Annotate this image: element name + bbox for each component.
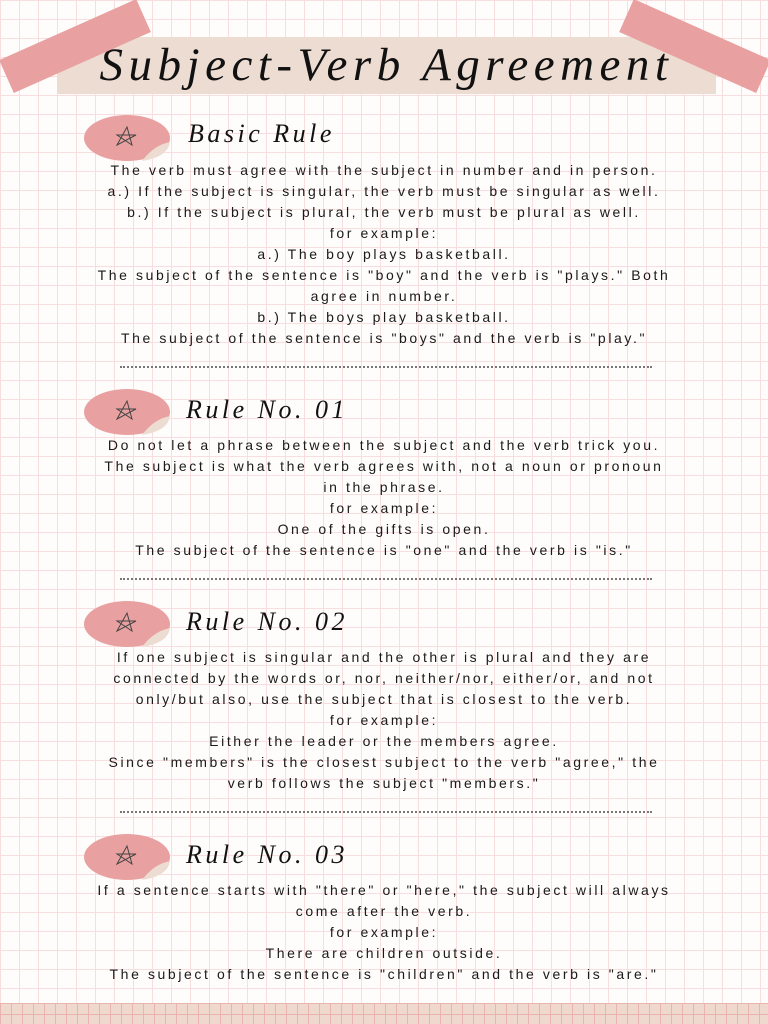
text: rule 1: in the phrase. <box>323 479 445 495</box>
icon: sticker rule 2 <box>84 601 170 647</box>
text: rule 3: If a sentence starts with "there" or "here," the subject will always <box>97 882 671 898</box>
text: basic rule: b.) If the subject is plural, the verb must be plural as well. <box>127 204 641 220</box>
text: basic rule: The subject of the sentence is "boys" and the verb is "play." <box>121 330 647 346</box>
text: rule 2: only/but also, use the subject that is closest to the verb. <box>136 691 632 707</box>
heading: rule 3: Rule No. 03 <box>186 840 348 869</box>
text: rule 2: for example: <box>330 712 438 728</box>
footer strip <box>0 1003 768 1024</box>
icon: sticker basic <box>84 115 170 161</box>
text: rule 2: Either the leader or the members agree. <box>209 733 559 749</box>
text: rule 1: One of the gifts is open. <box>278 521 490 537</box>
text: rule 1: for example: <box>330 500 438 516</box>
text: rule 2: verb follows the subject "members." <box>228 775 540 791</box>
title: Subject-Verb Agreement <box>100 39 673 91</box>
text: rule 2: Since "members" is the closest subject to the verb "agree," the <box>108 754 659 770</box>
text: rule 2: If one subject is singular and the other is plural and they are <box>117 649 651 665</box>
text: basic rule: The subject of the sentence is "boy" and the verb is "plays." Both <box>98 267 670 283</box>
text: rule 3: for example: <box>330 924 438 940</box>
text: rule 1: The subject of the sentence is "one" and the verb is "is." <box>135 542 633 558</box>
text: basic rule: b.) The boys play basketball. <box>257 309 511 325</box>
tape left <box>0 0 151 93</box>
text: rule 3: There are children outside. <box>266 945 502 961</box>
text: basic rule <box>98 162 670 346</box>
icon: sticker rule 3 <box>84 834 170 880</box>
text: basic rule: The verb must agree with the subject in number and in person. <box>111 162 657 178</box>
heading: rule 2: Rule No. 02 <box>186 607 348 636</box>
text: rule 3 <box>97 882 671 982</box>
tape right <box>619 0 768 93</box>
heading: basic rule: Basic Rule <box>188 119 335 148</box>
text: rule 3: The subject of the sentence is "children" and the verb is "are." <box>110 966 658 982</box>
text: rule 3: come after the verb. <box>296 903 472 919</box>
text: rule 2 <box>108 649 659 791</box>
text: rule 1: Do not let a phrase between the subject and the verb trick you. <box>108 437 660 453</box>
text: basic rule: a.) If the subject is singular, the verb must be singular as well. <box>108 183 660 199</box>
text: rule 2: connected by the words or, nor, neither/nor, either/or, and not <box>113 670 655 686</box>
text: basic rule: agree in number. <box>311 288 457 304</box>
text: basic rule: a.) The boy plays basketball. <box>257 246 511 262</box>
text: rule 1: The subject is what the verb agrees with, not a noun or pronoun <box>104 458 664 474</box>
text: basic rule: for example: <box>330 225 438 241</box>
heading: rule 1: Rule No. 01 <box>186 395 348 424</box>
icon: sticker rule 1 <box>84 389 170 435</box>
text: rule 1 <box>104 437 664 558</box>
